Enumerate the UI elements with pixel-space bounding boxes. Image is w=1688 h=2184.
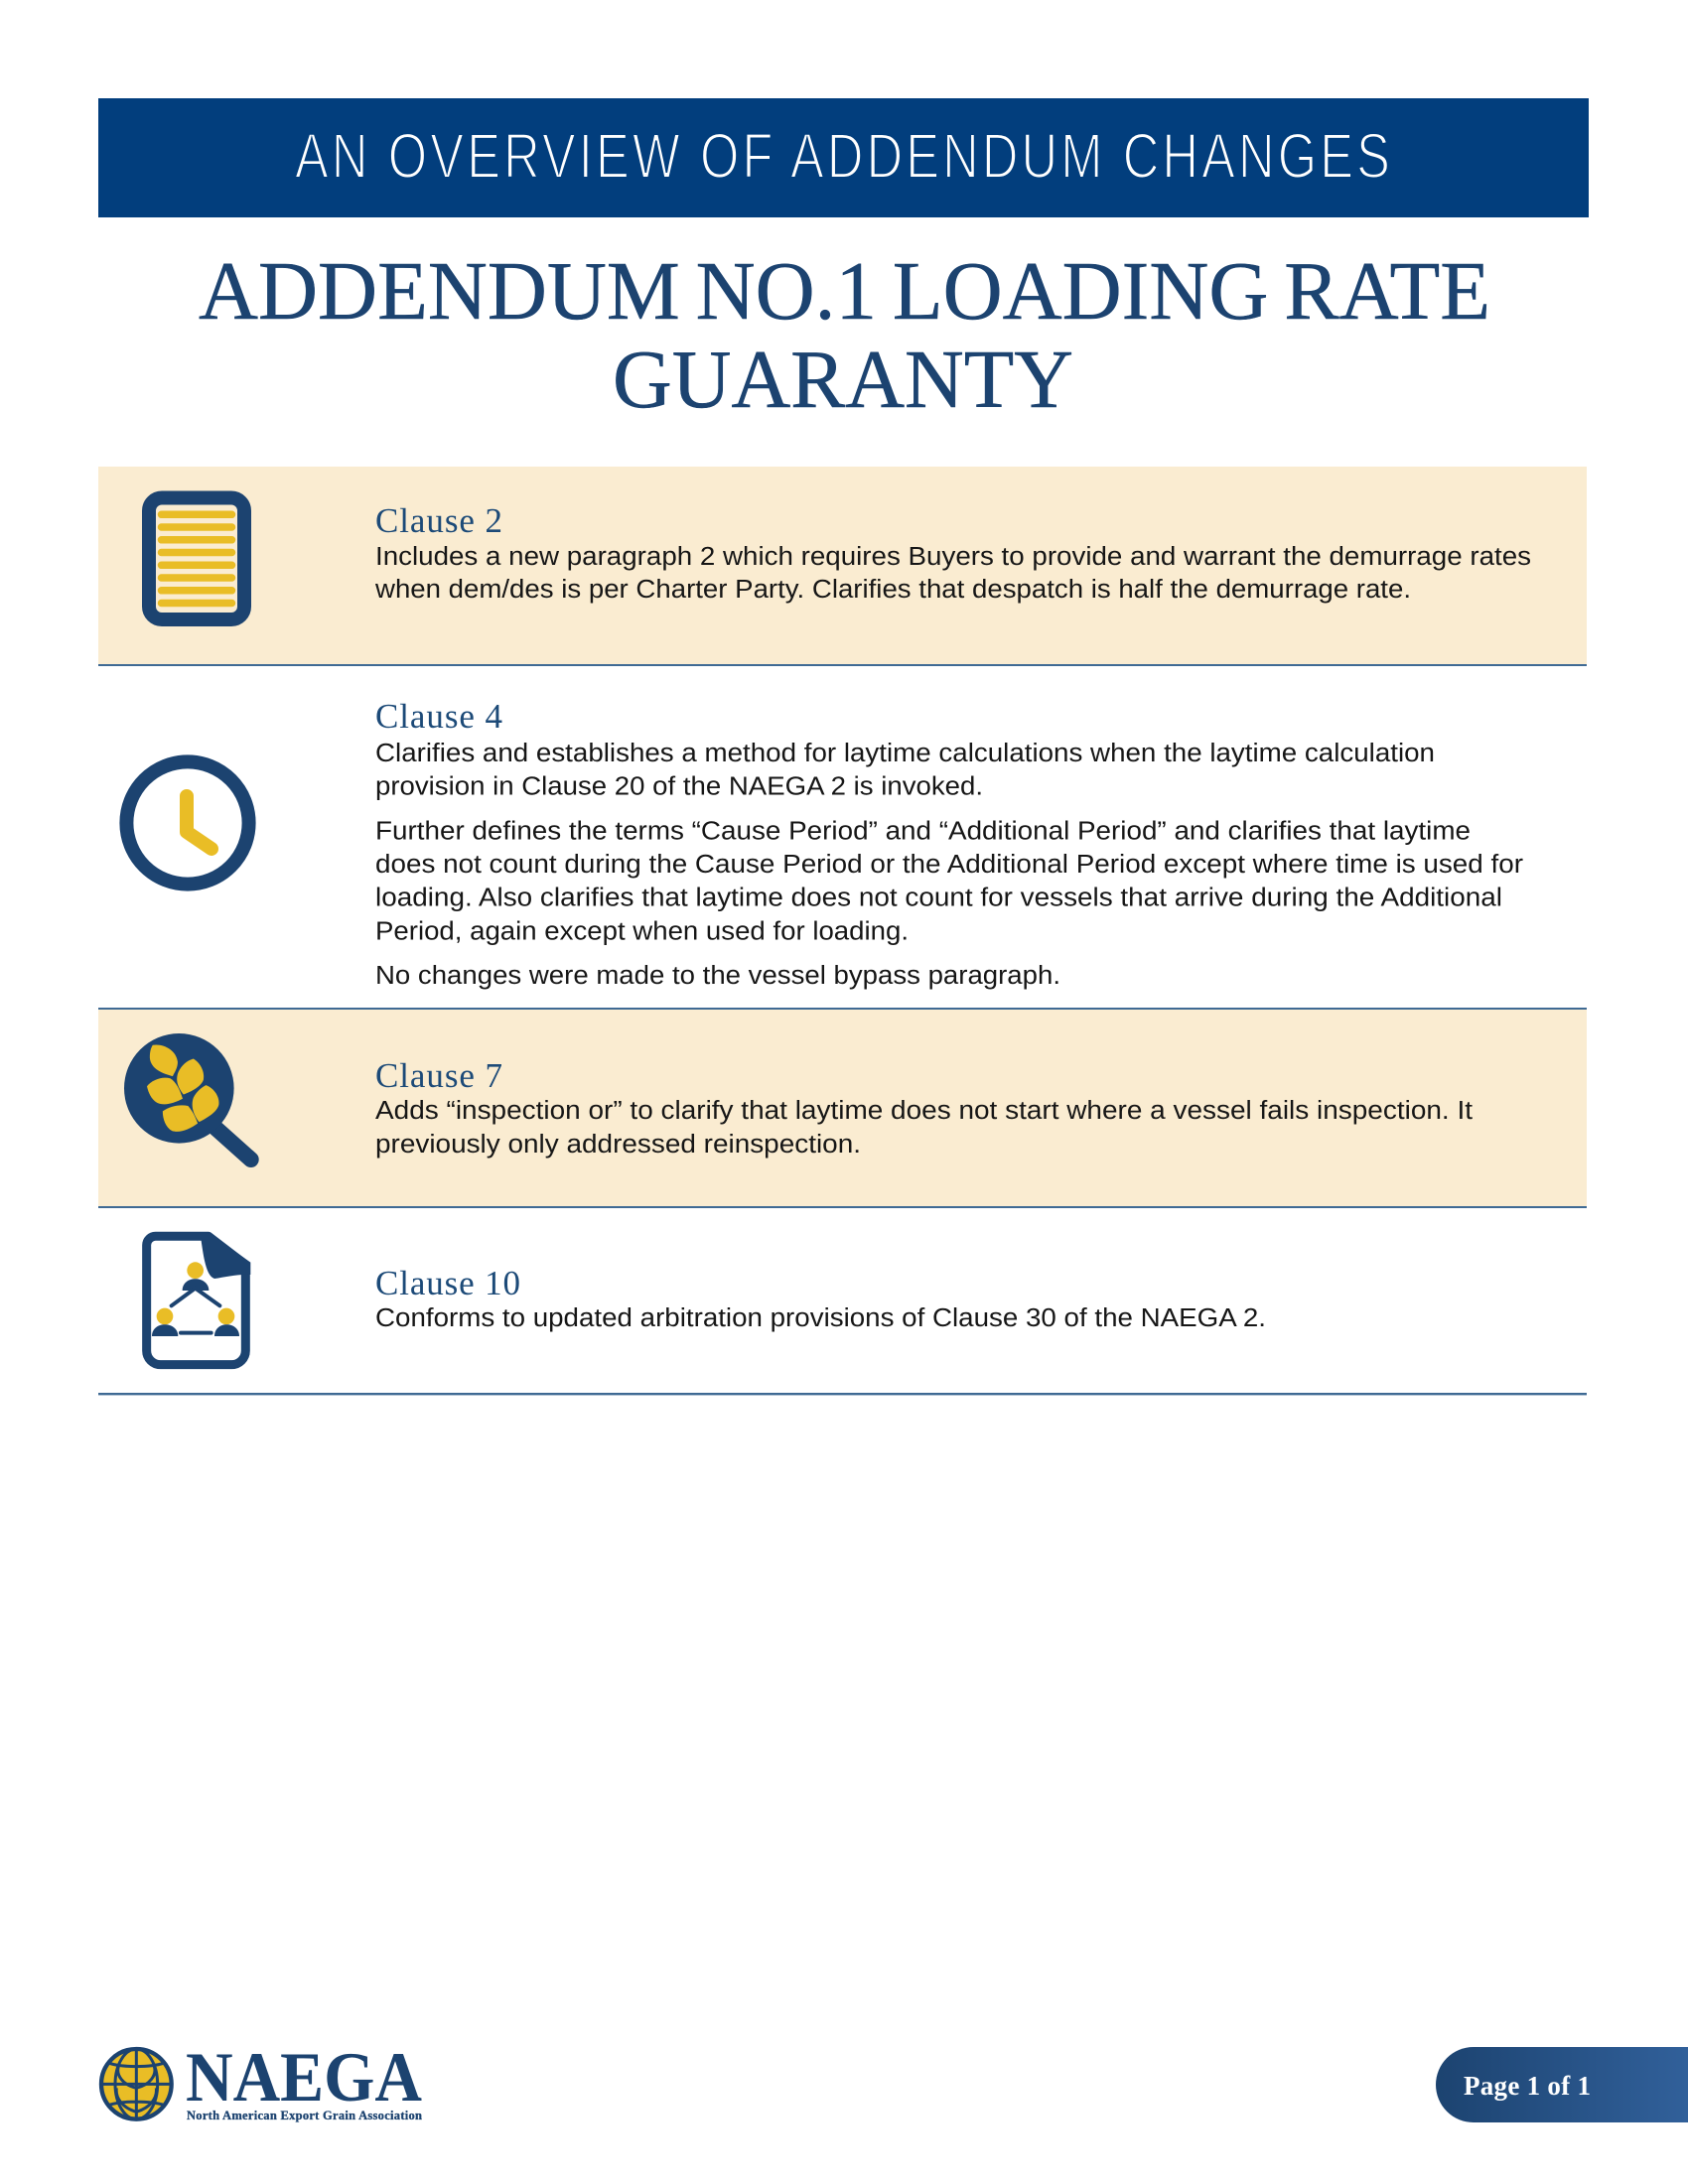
panel: clause 7 [98,1010,1587,1208]
clause 2 text: Includes a new paragraph 2 which requires Buyers to provide and warrant the demurrage rates [375,543,1531,571]
clause 7 text [375,1097,1473,1159]
clause 7 text: previously only addressed reinspection. [375,1131,861,1159]
clause 4 text: Further defines the terms “Cause Period” and “Additional Period” and clarifies that laytime [375,818,1471,846]
clause 7 heading: Clause 7 [375,1056,502,1095]
title: GUARANTY [613,334,1073,426]
page number pill: Page 1 of 1 [1464,2071,1591,2101]
panel: clause 10 [98,1234,1587,1395]
icon: magnifier with wheat [124,1033,251,1160]
clause 4 text: No changes were made to the vessel bypass paragraph. [375,962,1060,990]
clause 7 text: Adds “inspection or” to clarify that laytime does not start where a vessel fails inspection. It [375,1097,1473,1125]
title: ADDENDUM NO.1 LOADING RATE [199,245,1490,338]
clause 10 heading: Clause 10 [375,1264,520,1302]
header banner [98,98,1589,217]
clause 4 text [375,740,1524,990]
page number pill [1436,2047,1688,2122]
logo tagline: North American Export Grain Association [187,2109,422,2122]
title [199,245,1490,426]
header banner: AN OVERVIEW OF ADDENDUM CHANGES [295,120,1393,192]
icon: arbitration document [147,1234,250,1365]
panel: clause 4 [98,697,1587,1010]
clause 2 heading: Clause 2 [375,501,502,540]
logo wordmark: NAEGA [186,2039,422,2116]
clause 4 text: Clarifies and establishes a method for laytime calculations when the laytime calculation [375,740,1435,767]
clause 4 text: does not count during the Cause Period or the Additional Period except where time is used for [375,851,1524,879]
logo: NAEGA [101,2039,422,2122]
clause 4 heading: Clause 4 [375,697,502,736]
icon: document [149,498,244,619]
clause 2 text: when dem/des is per Charter Party. Clarifies that despatch is half the demurrage rate. [374,576,1411,604]
clause 4 text: loading. Also clarifies that laytime does not count for vessels that arrive during the Additional [375,885,1502,912]
panel: clause 2 [98,467,1587,666]
clause 4 text: Period, again except when used for loading. [375,917,909,945]
icon: globe with wheat [101,2049,172,2119]
clause 4 text: provision in Clause 20 of the NAEGA 2 is invoked. [375,772,983,800]
icon: clock [126,761,249,885]
clause 10 text: Conforms to updated arbitration provisions of Clause 30 of the NAEGA 2. [375,1304,1266,1332]
clause 2 text [374,543,1531,604]
